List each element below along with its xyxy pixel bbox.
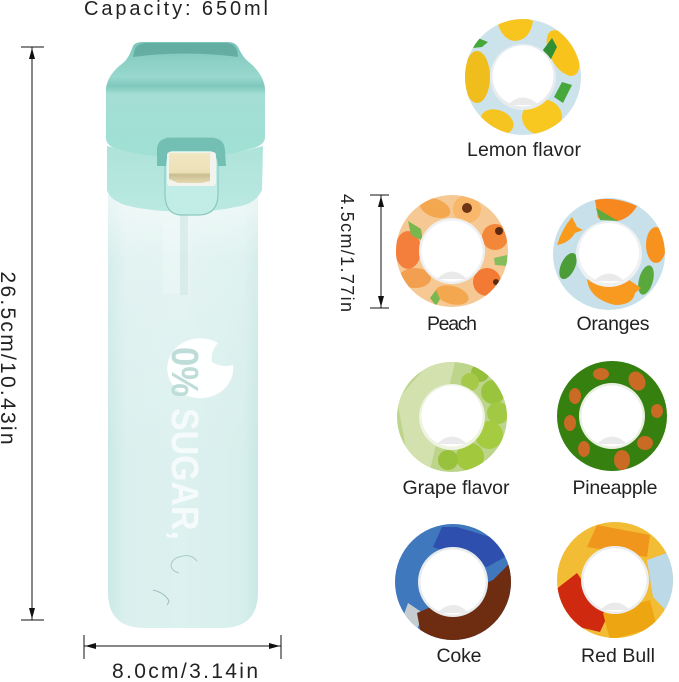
pod: coke bbox=[395, 524, 515, 645]
label: pineapple: Pineapple bbox=[572, 477, 658, 499]
pod: peach bbox=[395, 194, 508, 308]
pod: grape bbox=[397, 362, 509, 472]
bottle logo bbox=[163, 338, 233, 540]
label: grape: Grape flavor bbox=[402, 477, 510, 499]
height dimension arrow bbox=[21, 47, 44, 620]
width dimension arrow bbox=[84, 635, 281, 659]
pod: pineapple bbox=[557, 361, 667, 471]
label: peach: Peach bbox=[427, 313, 477, 335]
scent pod height arrow bbox=[370, 195, 389, 308]
bottom details bbox=[171, 556, 197, 573]
label: lemon: Lemon flavor bbox=[467, 139, 582, 161]
pod: oranges bbox=[553, 198, 666, 310]
latch bbox=[157, 138, 226, 215]
bottle logo: SUGAR, bbox=[163, 408, 205, 540]
pod: lemon bbox=[464, 18, 586, 139]
label: red bull: Red Bull bbox=[581, 645, 655, 667]
straw bbox=[163, 222, 189, 294]
scent pod height label: 4.5cm/1.77in bbox=[337, 194, 357, 312]
label: coke: Coke bbox=[436, 645, 482, 667]
cap upper bbox=[106, 42, 265, 158]
bottle logo: 0% bbox=[163, 347, 205, 397]
bottle bbox=[106, 42, 265, 628]
bottle body bbox=[108, 195, 258, 628]
cap opening bbox=[133, 43, 238, 57]
latch button bbox=[169, 153, 210, 183]
pod: red bull bbox=[555, 522, 675, 640]
label: oranges: Oranges bbox=[576, 313, 650, 335]
cap lower band bbox=[107, 146, 263, 212]
